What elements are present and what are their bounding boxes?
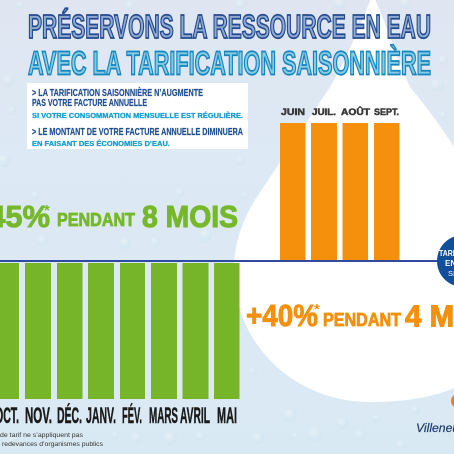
info note 1: SI VOTRE CONSOMMATION MENSUELLE EST RÉGULIÈRE. (32, 111, 243, 120)
winter month labels: DÉC. (57, 403, 82, 428)
info text 1: > LA TARIFICATION SAISONNIÈRE N’AUGMENTE (32, 86, 203, 99)
winter month labels: AVRIL (180, 403, 210, 428)
logo (416, 394, 454, 435)
summer month labels: JUIN (281, 107, 305, 117)
footnote: de tarif ne s’appliquent pas (0, 433, 83, 439)
badge (437, 235, 454, 287)
winter month labels: NOV. (25, 403, 52, 428)
baseline (0, 260, 440, 262)
orange headline: * (314, 301, 320, 318)
orange headline: +40% (246, 298, 318, 333)
orange headline (246, 298, 454, 334)
orange bars (280, 123, 400, 260)
green headline (0, 199, 238, 234)
winter month labels: FÉV. (122, 403, 142, 428)
winter month labels: JANV. (86, 403, 116, 428)
summer month labels: AOÛT (341, 106, 371, 117)
info text 2: > LE MONTANT DE VOTRE FACTURE ANNUELLE DIMINUERA (32, 127, 243, 138)
summer month labels: JUIL. (312, 107, 336, 117)
info note 2: EN FAISANT DES ÉCONOMIES D’EAU. (32, 139, 170, 148)
green headline: 8 MOIS (142, 199, 238, 234)
title (28, 8, 431, 82)
green headline: PENDANT (57, 210, 135, 230)
footnote (0, 433, 103, 448)
orange headline: PENDANT (323, 310, 401, 330)
footnote: redevances d’organismes publics (2, 442, 103, 448)
green bars (0, 263, 240, 399)
water drop shape (234, 0, 454, 402)
summer month labels (281, 106, 399, 117)
info box (27, 83, 248, 149)
winter month labels: MARS (149, 403, 178, 428)
winter month labels (0, 403, 237, 428)
infographic canvas: MAI (217, 403, 237, 428)
summer month labels: SEPT. (374, 107, 399, 117)
info box: PAS VOTRE FACTURE ANNUELLE (32, 98, 147, 109)
green headline: * (44, 202, 50, 219)
